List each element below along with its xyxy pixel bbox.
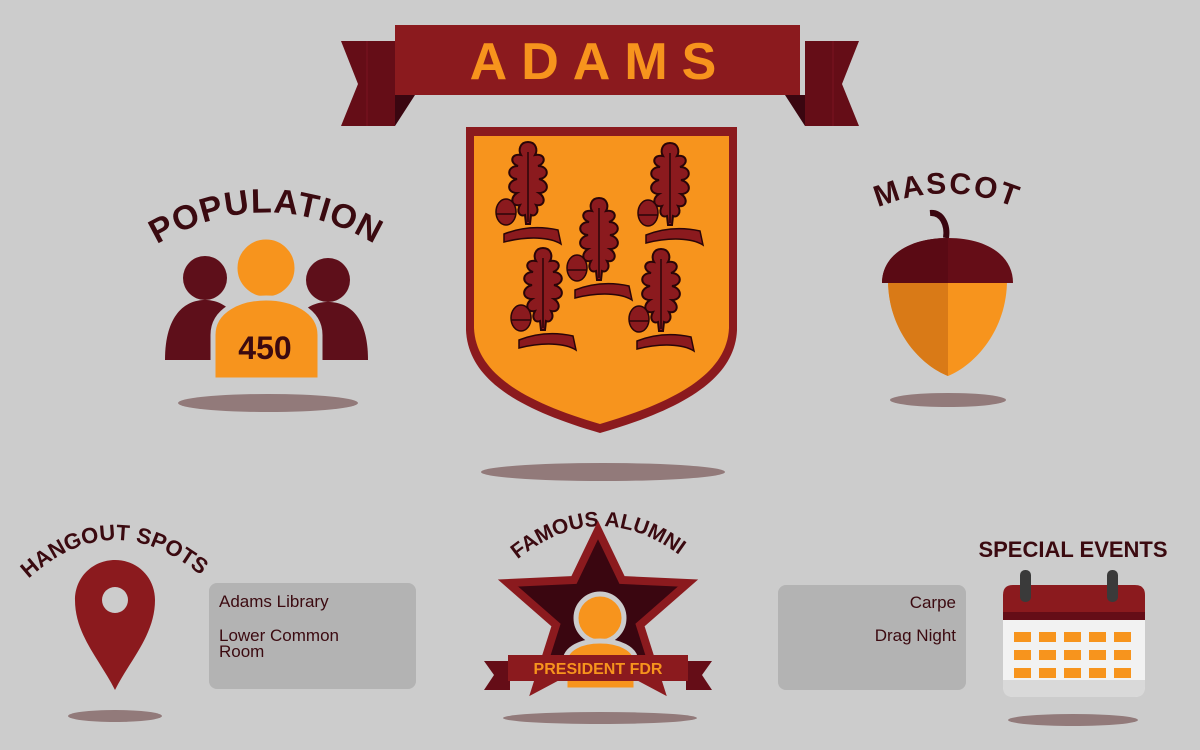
title banner (341, 25, 859, 126)
panel: special events (778, 537, 1168, 726)
title text: ADAMS (470, 33, 730, 91)
icon: people: 450 (238, 330, 292, 366)
events list box: Carpe (910, 593, 956, 612)
crest shadow (481, 463, 725, 481)
mascot heading: MASCOT (873, 172, 1021, 206)
icon: star with person (508, 530, 688, 690)
hangout heading: HANGOUT SPOTS (20, 524, 208, 578)
events list box: Drag Night (875, 626, 956, 645)
panel: population (148, 189, 384, 412)
icon: calendar (1003, 570, 1145, 697)
panel: mascot (873, 172, 1021, 407)
hangout list box: Room (219, 642, 264, 661)
ribbon: president fdr: PRESIDENT FDR (534, 661, 663, 678)
panel: famous alumni (484, 512, 712, 724)
hangout list box: Lower Common (219, 626, 339, 645)
crest shield (466, 127, 737, 433)
icon: acorn (882, 213, 1013, 376)
ribbon: president fdr (484, 655, 712, 690)
events list box (778, 585, 966, 690)
icon: map pin (75, 560, 155, 690)
oak leaves (496, 142, 703, 351)
icon: people (165, 237, 368, 380)
population heading: POPULATION (148, 189, 384, 244)
panel: hangout spots (20, 524, 416, 722)
hangout list box (209, 583, 416, 689)
hangout list box: Adams Library (219, 592, 329, 611)
events heading: SPECIAL EVENTS (978, 537, 1168, 562)
alumni heading: FAMOUS ALUMNI (510, 512, 686, 558)
